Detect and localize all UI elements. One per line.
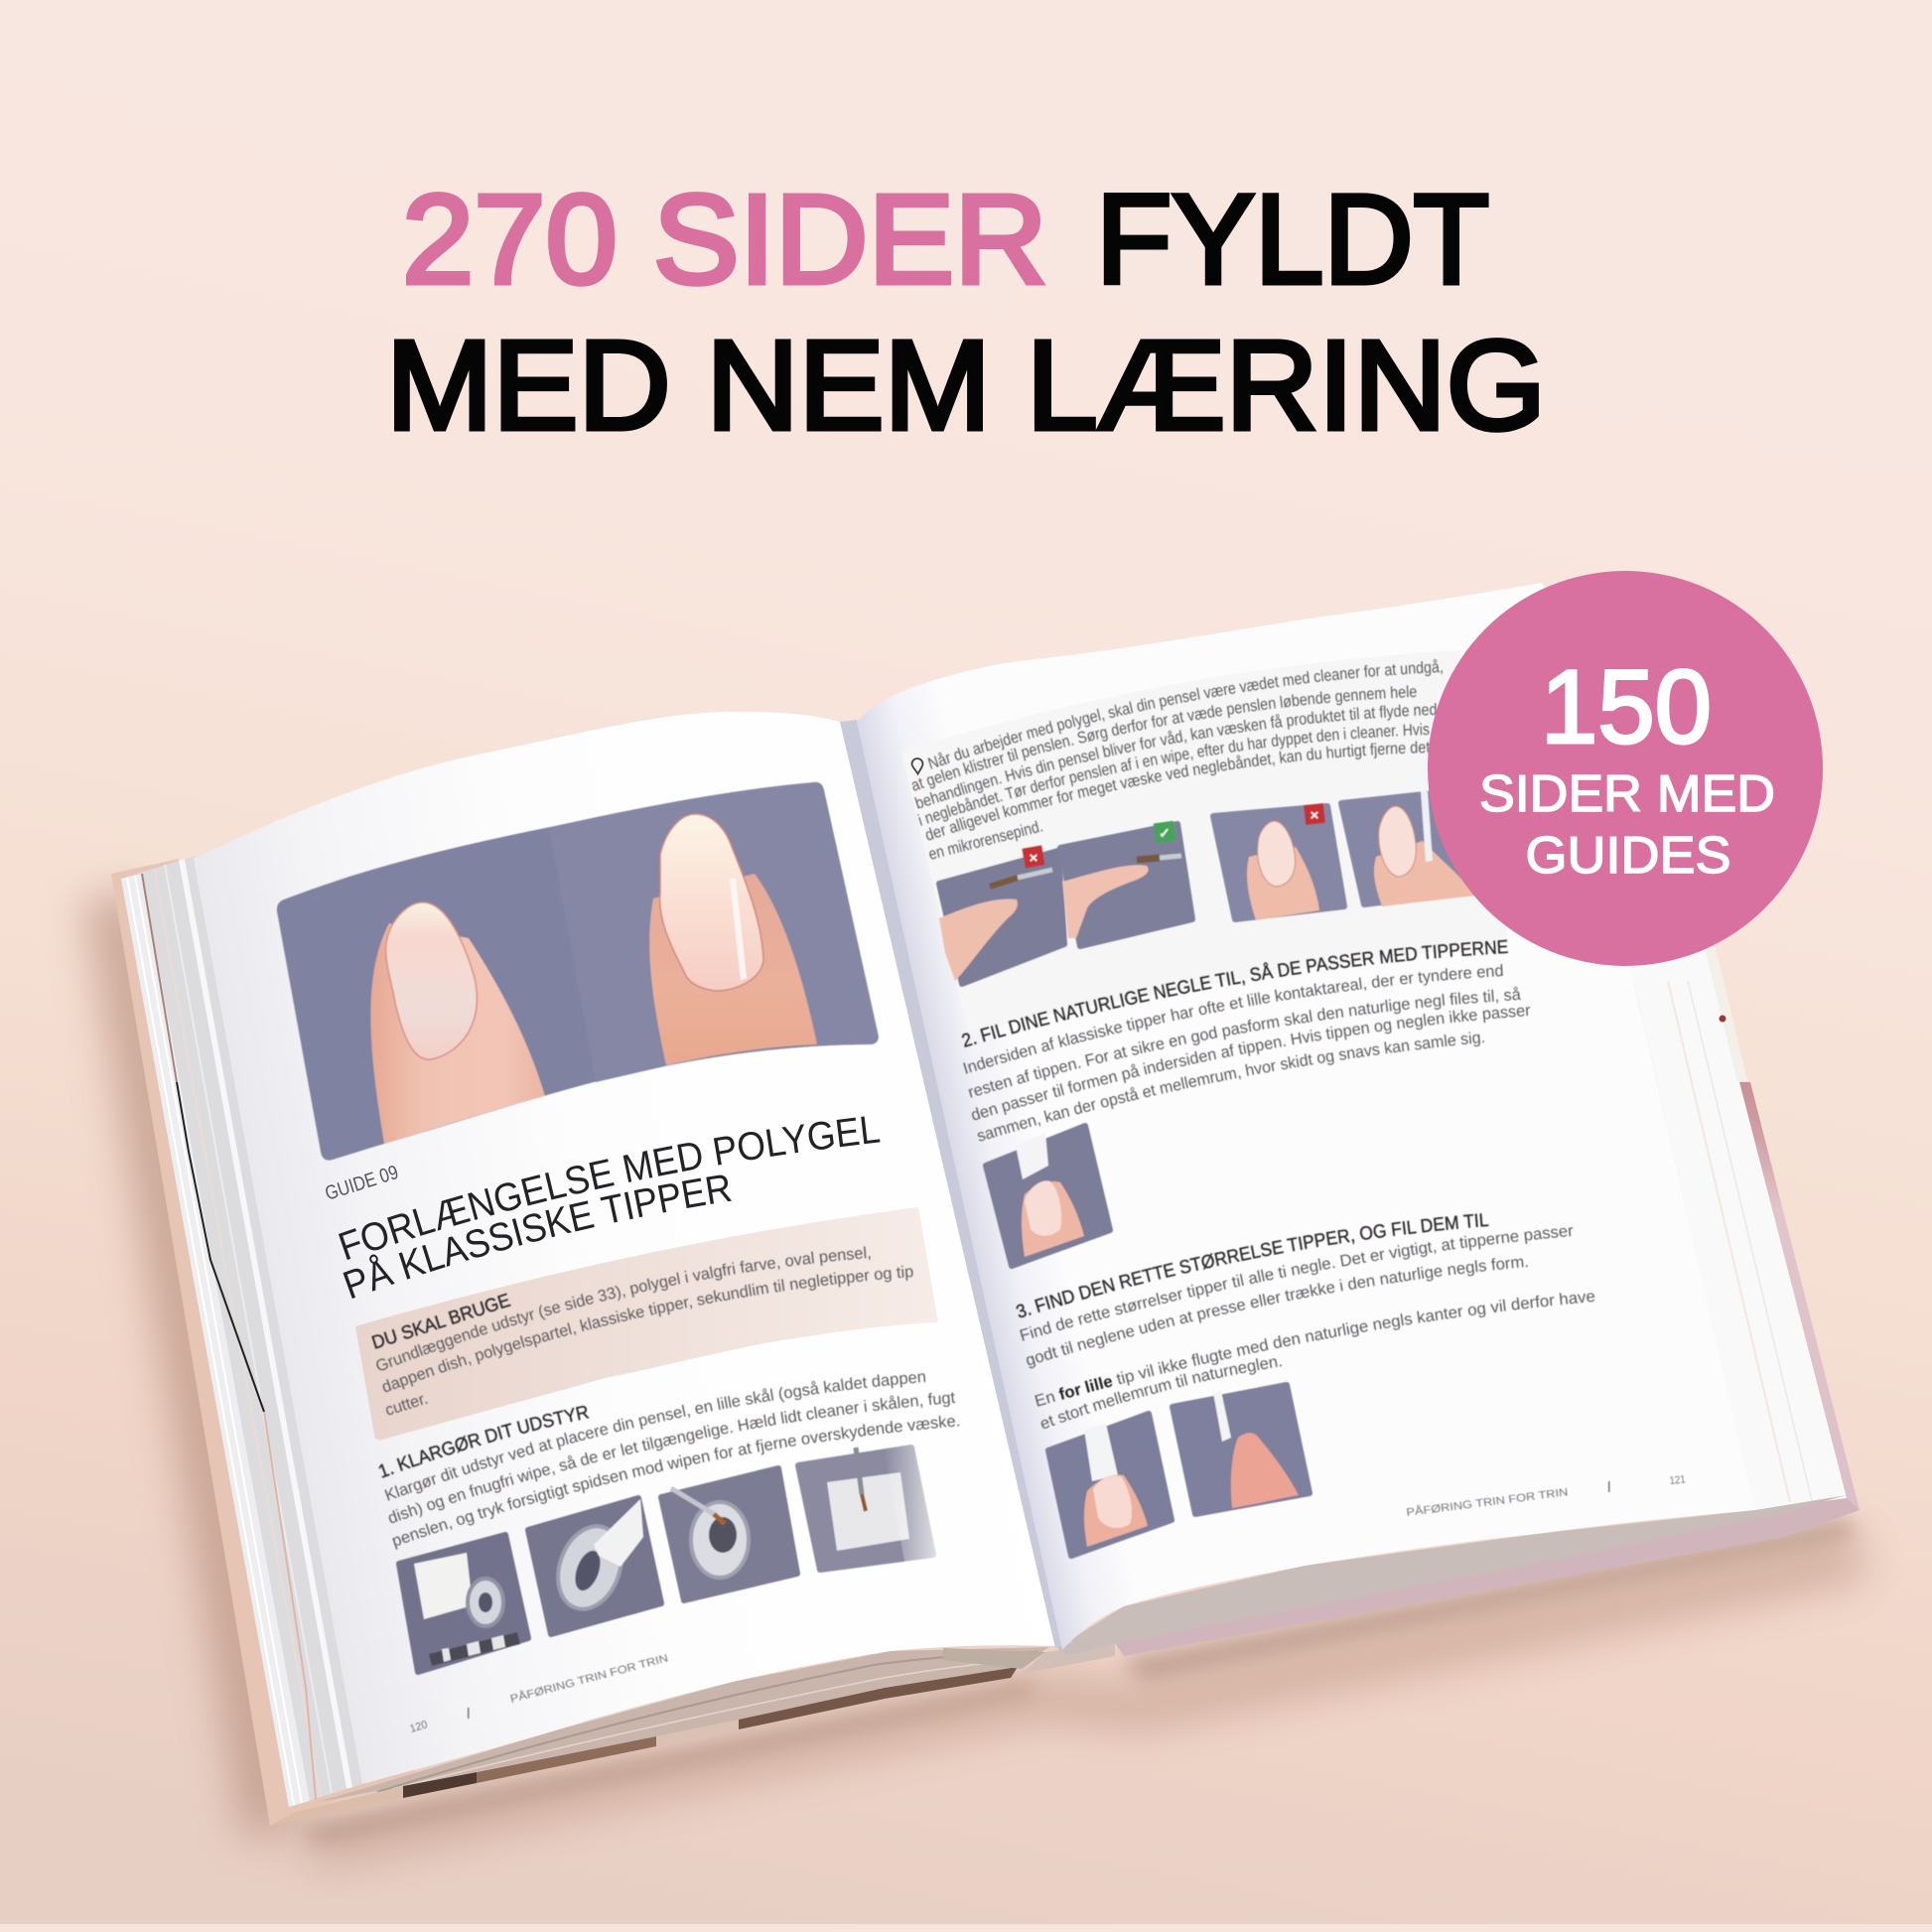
step 3 text: 3. FIND DEN RETTE STØRRELSE TIPPER, OG FIL DEM TIL (1015, 1212, 1489, 1318)
tip text: at gelen klistrer til penslen. Sørg derfor for at væde penslen løbende gennem hele (911, 685, 1418, 792)
page footer: 121 (1669, 1473, 1686, 1487)
guide label: GUIDE 09 (323, 1162, 401, 1205)
photo: correct brush (1060, 821, 1192, 946)
panel: du skal bruge: cutter. (383, 1390, 430, 1420)
page footer (408, 1651, 669, 1735)
photo: wrong tip (1213, 803, 1344, 920)
tip text (911, 658, 1444, 864)
title (386, 169, 1546, 457)
right cover side edge (1739, 1082, 1860, 1510)
step 1 text: dish) og en fnugfri wipe, så de er let tilgængelige. Hæld lidt cleaner i skålen, fugt (388, 1392, 956, 1524)
photo: tip against nail (986, 1126, 1110, 1266)
photo: side view fingertip (1173, 1385, 1310, 1514)
step 2 text (961, 939, 1531, 1142)
gutter shade (840, 720, 1072, 1648)
tip text: i neglebåndet. Tør derfor penslen af i en wipe, efter du har dyppet den i cleaner. Hvis (917, 723, 1430, 826)
page footer: PÅFØRING TRIN FOR TRIN (1406, 1485, 1569, 1519)
right cover bottom edge (1115, 1494, 1860, 1656)
right finger (649, 874, 817, 1065)
step 2 text: sammen, kan der opstå et mellemrum, hvor skidt og snavs kan samle sig. (977, 1031, 1485, 1142)
brown speck (1720, 1015, 1725, 1023)
step 3 text (1015, 1212, 1595, 1430)
step 2 text: 2. FIL DINE NATURLIGE NEGLE TIL, SÅ DE PASSER MED TIPPERNE (961, 939, 1509, 1048)
callout: 150 sider med guides: GUIDES (1525, 827, 1731, 885)
book shadow (84, 894, 1866, 1866)
title: FYLDT (1096, 169, 1489, 311)
step 3 text: Find de rette størrelser tipper til alle ti negle. Det er vigtigt, at tipperne passer (1019, 1227, 1574, 1342)
panel: left page content (276, 781, 982, 1735)
left cover (111, 859, 417, 1826)
right page stack (1542, 583, 1847, 1510)
photo: bottle pouring in dish (528, 1498, 661, 1634)
photo: wipe and dish (399, 1535, 528, 1672)
page footer: PÅFØRING TRIN FOR TRIN (508, 1651, 669, 1706)
callout: 150 sider med guides: 150 (1541, 649, 1712, 765)
title: MED NEM LÆRING (386, 315, 1546, 457)
guide title: FORLÆNGELSE MED POLYGEL (339, 1116, 880, 1260)
step 2 text: resten af tippen. For at sikre en god pasform skal den naturlige negl files til, så (968, 986, 1521, 1098)
tip text: behandlingen. Hvis din pensel bliver for våd, kan væsken få produktet til at flyde ned (913, 702, 1438, 810)
right page (857, 583, 1755, 1650)
icon: red cross: × (1311, 807, 1319, 824)
left bottom page edge and cover strip (270, 1647, 1049, 1826)
right bottom page edge (1057, 1495, 1847, 1656)
step 3 text: et stort mellemrum til naturneglen. (1040, 1358, 1283, 1430)
panel: right page content (911, 629, 1704, 1560)
panel: du skal bruge: dappen dish, polygelspartel, klassiske tipper, sekundlim til negletipper og tip (382, 1265, 913, 1393)
photo: right tip (1341, 791, 1475, 906)
title: 270 SIDER (402, 169, 1047, 311)
page footer: 120 (408, 1719, 429, 1735)
step 3 text: godt til neglene uden at presse eller trække i den naturlige negls form. (1026, 1257, 1529, 1369)
panel: du skal bruge: Grundlæggende udstyr (se side 33), polygel i valgfri farve, oval pensel, (375, 1245, 872, 1371)
icon: green check: ✓ (1159, 825, 1171, 841)
tip box (901, 650, 1509, 1033)
panel: du skal bruge: DU SKAL BRUGE (369, 1291, 513, 1354)
step 3 text: En for lille tip vil ikke flugte med den naturlige negls kanter og vil derfor have (1035, 1293, 1595, 1408)
left finger (370, 923, 545, 1144)
callout: 150 sider med guides (1428, 571, 1823, 966)
photo: too small tip (1048, 1414, 1172, 1556)
step 1 text: Klargør dit udstyr ved at placere din pensel, en lille skål (også kaldet dappen (384, 1372, 926, 1501)
step 2 text: den passer til formen på indersiden af tippen. Hvis tippen og neglen ikke passer (971, 1006, 1531, 1121)
photo: brush in dish (661, 1468, 797, 1600)
step 1 text: penslen, og tryk forsigtigt spidsen mod wipen for at fjerne overskydende væske. (391, 1415, 960, 1551)
left page (194, 712, 1055, 1784)
left page stack (121, 856, 362, 1807)
tip text: Når du arbejder med polygel, skal din pensel være vædet med cleaner for at undgå, (927, 658, 1444, 770)
book: open book mockup (111, 583, 1860, 1826)
callout: 150 sider med guides: SIDER MED (1479, 765, 1775, 823)
page footer (1406, 1473, 1686, 1519)
step 2 text: Indersiden af klassiske tipper har ofte et lille kontaktareal, der er tyndere end (963, 963, 1503, 1074)
icon: red cross: × (1030, 850, 1038, 867)
tip text: der alligevel kommer for meget væske ved neglebåndet, kan du hurtigt fjerne det (925, 741, 1430, 841)
photo: two fingernails (277, 782, 879, 1161)
spine binding (943, 1643, 1115, 1674)
guide title: PÅ KLASSISKE TIPPER (344, 1175, 732, 1299)
icon: tip pin (911, 759, 923, 774)
step 1 text: 1. KLARGØR DIT UDSTYR (378, 1405, 590, 1479)
photo: wrong brush (939, 845, 1064, 984)
photo: brush on wipe (798, 1442, 939, 1570)
tip text: en mikrorensepind. (927, 817, 1044, 864)
panel: du skal bruge (355, 1207, 938, 1440)
bottom edge strip (0, 1924, 1932, 1932)
